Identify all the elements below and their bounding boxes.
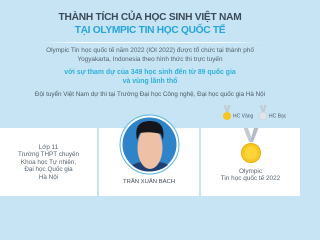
highlight text bbox=[64, 68, 236, 85]
school text: Hà Nội bbox=[39, 174, 58, 181]
medal caption: Tin học quốc tế 2022 bbox=[221, 175, 280, 182]
school text: Trường THPT chuyên bbox=[18, 151, 79, 158]
panel: medal bbox=[201, 128, 300, 196]
school text: Lớp 11 bbox=[39, 144, 58, 151]
title bbox=[58, 10, 242, 36]
highlight text: với sự tham dự của 349 học sinh đến từ 89 quốc gia bbox=[64, 68, 236, 76]
school text: Khoa học Tự nhiên, bbox=[21, 159, 76, 166]
highlight text: và vùng lãnh thổ bbox=[123, 78, 177, 85]
title: TẠI OLYMPIC TIN HỌC QUỐC TẾ bbox=[75, 24, 225, 36]
panel: student bbox=[99, 128, 199, 196]
medal caption bbox=[220, 168, 280, 182]
legend bbox=[223, 105, 287, 120]
school text: Đại học Quốc gia bbox=[24, 166, 73, 173]
team venue text: Đội tuyển Việt Nam dự thi tại Trường Đại học Công nghệ, Đại học quốc gia Hà Nội bbox=[35, 91, 265, 98]
panel: school bbox=[0, 128, 97, 196]
title: THÀNH TÍCH CỦA HỌC SINH VIỆT NAM bbox=[59, 12, 241, 23]
intro text bbox=[46, 46, 254, 63]
school text bbox=[18, 144, 79, 181]
legend: HC Vàng bbox=[233, 114, 254, 120]
medal caption: Olympic bbox=[239, 168, 262, 174]
student name: TRẦN XUÂN BÁCH bbox=[123, 178, 175, 184]
student portrait bbox=[120, 114, 180, 174]
legend: HC Bạc bbox=[269, 114, 287, 120]
icon: gold medal bbox=[241, 128, 261, 163]
intro text: Olympic Tin học quốc tế năm 2022 (IOI 2022) được tổ chức tại thành phố bbox=[46, 47, 254, 54]
intro text: Yogyakarta, Indonesia theo hình thức thi trực tuyến bbox=[77, 56, 223, 63]
